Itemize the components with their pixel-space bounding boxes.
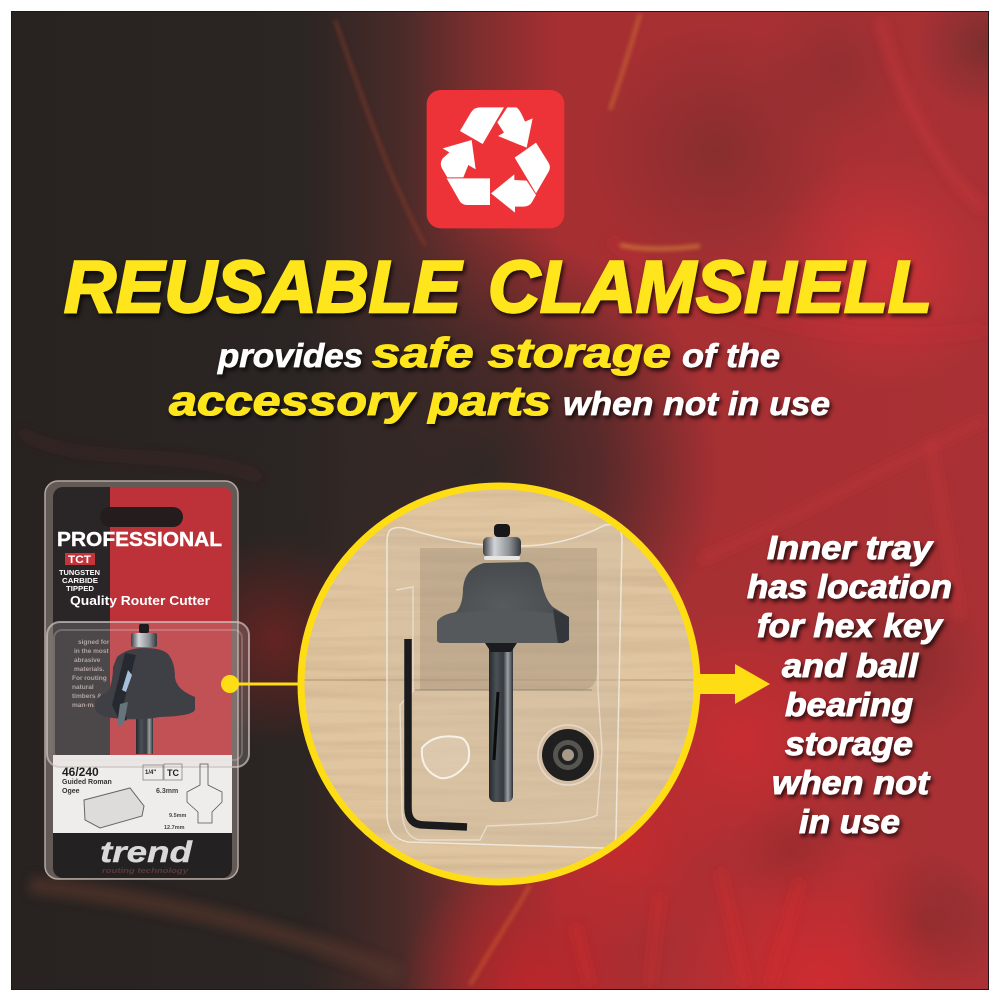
caption: inner tray description: bearing xyxy=(785,686,913,723)
product pack: clamshell with router cutter: Guided Roman xyxy=(62,779,112,786)
connector line with dot xyxy=(221,675,300,693)
product pack: clamshell with router cutter: abrasive xyxy=(74,657,101,664)
caption: inner tray description: Inner tray xyxy=(767,529,934,566)
caption: inner tray description xyxy=(747,529,952,840)
caption: inner tray description: and ball xyxy=(782,647,919,684)
title: reusable clamshell: REUSABLE xyxy=(64,247,463,328)
product pack: clamshell with router cutter: TUNGSTEN xyxy=(59,568,100,577)
subtitle text: accessory parts xyxy=(169,377,551,424)
product pack: clamshell with router cutter: For routing xyxy=(72,675,107,682)
product pack: clamshell with router cutter: 46/240 xyxy=(62,765,99,779)
product pack: clamshell with router cutter: materials. xyxy=(74,666,105,673)
arrow pointing to caption xyxy=(698,664,770,704)
caption: inner tray description: storage xyxy=(785,725,913,762)
product pack: clamshell with router cutter: CARBIDE xyxy=(62,576,98,585)
circular photo: inner tray with cutter, hex key and ball bearing xyxy=(300,485,698,883)
product pack: clamshell with router cutter: in the most xyxy=(74,648,110,655)
subtitle text: provides xyxy=(217,337,363,374)
title: reusable clamshell: CLAMSHELL xyxy=(488,247,932,328)
product pack: clamshell with router cutter: PROFESSIONAL xyxy=(57,529,222,551)
subtitle text: safe storage xyxy=(372,329,671,376)
subtitle text xyxy=(169,329,830,424)
product pack: clamshell with router cutter: timbers & xyxy=(72,693,102,700)
product pack: clamshell with router cutter: 12.7mm xyxy=(164,825,185,831)
product pack: clamshell with router cutter: man-made xyxy=(72,702,105,709)
product pack: clamshell with router cutter: Ogee xyxy=(62,788,80,795)
product pack: clamshell with router cutter: 1/4" xyxy=(145,770,156,776)
product pack: clamshell with router cutter: signed for xyxy=(78,639,110,646)
hex key xyxy=(408,639,467,827)
subtitle text: of the xyxy=(682,337,780,374)
product pack: clamshell with router cutter: TIPPED xyxy=(66,584,95,593)
product pack: clamshell with router cutter: natural xyxy=(72,684,94,691)
product pack: clamshell with router cutter: trend xyxy=(100,836,193,869)
router cutter xyxy=(437,524,569,802)
title: reusable clamshell xyxy=(64,247,932,328)
product pack: clamshell with router cutter: 6.3mm xyxy=(156,788,178,795)
caption: inner tray description: in use xyxy=(799,803,900,840)
product pack: clamshell with router cutter xyxy=(45,481,249,879)
subtitle text: when not in use xyxy=(563,385,830,422)
product pack: clamshell with router cutter: TCT xyxy=(68,554,91,566)
product pack: clamshell with router cutter: routing technology xyxy=(102,868,189,875)
product pack: clamshell with router cutter: 9.5mm xyxy=(169,813,187,819)
ball bearing xyxy=(542,729,594,781)
caption: inner tray description: when not xyxy=(772,764,931,801)
icon: recycle symbol on red rounded square xyxy=(427,90,564,228)
product pack: clamshell with router cutter: Quality Router Cutter xyxy=(70,593,210,608)
caption: inner tray description: for hex key xyxy=(757,607,944,644)
product pack: clamshell with router cutter: TC xyxy=(167,768,179,778)
caption: inner tray description: has location xyxy=(747,568,952,605)
clear plastic tray xyxy=(387,525,622,848)
